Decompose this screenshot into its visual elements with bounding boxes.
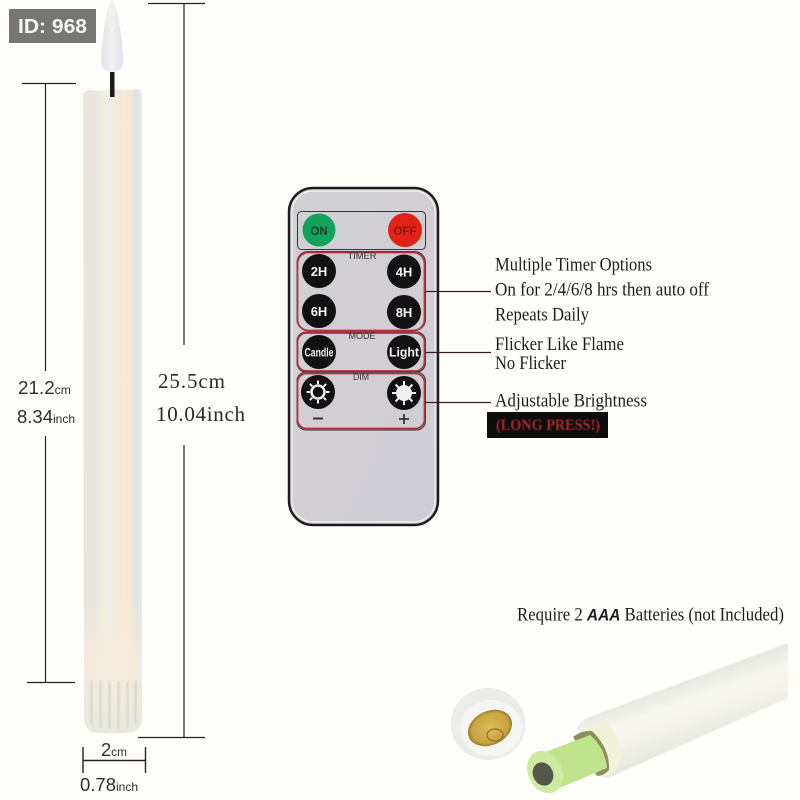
tube collar [578,722,622,777]
ID badge: ID: 968 [18,16,87,38]
button: 4H [387,254,421,288]
height dimension: total [138,3,246,738]
battery note: Require 2 AAA Batteries (not Included) [517,606,784,626]
label: DIM: DIM [353,372,369,382]
wick [110,72,114,97]
label: 0.78inch: 0.78inch [80,774,138,795]
label: TIMER: TIMER [348,251,377,261]
power buttons [298,212,426,250]
feature text: mode: No Flicker [495,354,566,374]
mode group: Light [389,344,420,360]
label: MODE: MODE [348,331,376,341]
button: Light [387,335,421,369]
battery seat ring [573,731,609,776]
label: 2cm: 2cm [101,739,127,760]
label: 21.2cm: 21.2cm [18,377,71,398]
mode group: Candle [304,348,334,360]
leader lines [425,292,491,402]
button: OFF [388,213,422,247]
feature text: mode: Flicker Like Flame [495,335,624,355]
button: ON [302,214,336,246]
label: 8.34inch: 8.34inch [17,406,75,427]
label: 25.5cm: 25.5cm [158,369,225,393]
flame [101,0,123,72]
feature text: timer [495,256,710,326]
timer group: 4H [396,264,412,280]
photo: candle battery compartment [450,643,788,799]
power buttons: ON [310,226,328,238]
end cap [450,688,526,760]
power buttons: OFF [394,226,416,238]
dim group [297,372,426,430]
feature text: timer: Repeats Daily [495,306,590,326]
width dimension [80,739,146,795]
long press tag [487,412,608,438]
candle tube [577,643,788,778]
timer group: 2H [311,264,327,279]
timer group: 8H [396,305,412,320]
timer group: 6H [311,304,327,319]
mode group [297,331,426,372]
battery end [520,745,570,799]
minus sign [313,418,323,420]
icon: candle [83,0,142,734]
button: Candle [302,335,336,369]
feature text: brightness: Adjustable Brightness [495,392,647,412]
feature text: mode [495,335,624,374]
battery tube [532,735,607,792]
long press tag: (LONG PRESS!) [496,417,600,434]
button: 2H [302,254,336,288]
feature text: brightness [487,392,647,438]
timer group [297,251,426,330]
button: 8H [387,295,421,329]
height dimension: body [17,83,76,683]
button: dim up [387,376,421,410]
feature text: timer: On for 2/4/6/8 hrs then auto off [495,280,710,300]
label: 10.04inch: 10.04inch [156,402,246,426]
contact [529,759,557,789]
remote body [289,188,438,525]
ribbed base [90,681,137,729]
ID badge [9,9,96,43]
plus sign [399,414,409,424]
feature text: timer: Multiple Timer Options [495,256,652,276]
candle body [83,89,142,734]
remote control [289,188,438,525]
button: 6H [302,294,336,328]
button: dim down [301,375,335,409]
